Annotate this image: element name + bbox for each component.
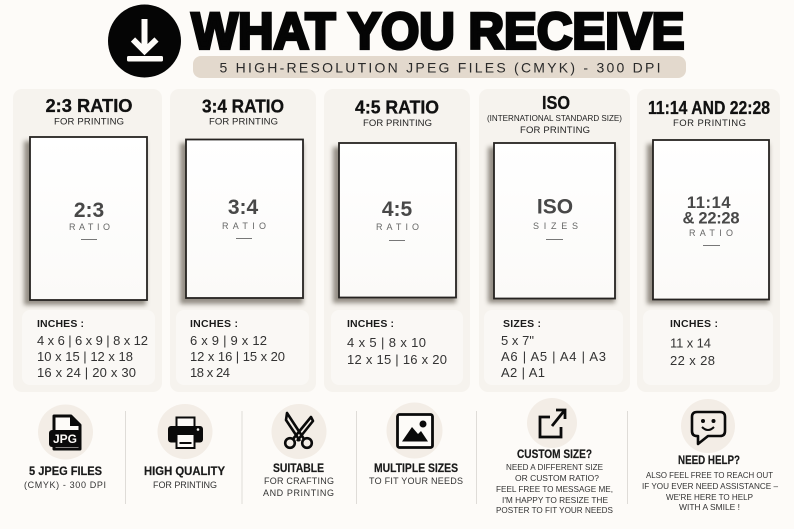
description: POSTER TO FIT YOUR NEEDS	[496, 505, 613, 515]
description: WITH A SMILE !	[679, 502, 740, 512]
size list	[22, 310, 155, 385]
size list	[643, 310, 773, 385]
size list: 4 x 5 | 8 x 10	[347, 335, 426, 350]
caption: FOR PRINTING	[209, 116, 278, 128]
title: WHAT YOU RECEIVE	[192, 2, 684, 60]
label: HIGH QUALITY	[144, 464, 225, 478]
feature: multiple sizes	[369, 402, 463, 486]
icon: download	[108, 4, 181, 78]
poster frame: 2:3	[74, 199, 104, 222]
panel: 2:3 ratio	[13, 89, 162, 392]
size list: A6 | A5 | A4 | A3	[501, 349, 606, 364]
panel: 3:4 ratio	[170, 89, 316, 392]
description: WE'RE HERE TO HELP	[666, 492, 753, 502]
size list: INCHES :	[37, 318, 84, 330]
poster frame	[647, 140, 769, 304]
poster frame	[180, 140, 303, 304]
caption: FOR PRINTING	[363, 118, 432, 129]
feature: need help	[642, 399, 778, 512]
heading: 2:3 RATIO	[46, 96, 132, 116]
icon: jpg file: JPG	[53, 432, 77, 446]
size list: INCHES :	[347, 318, 394, 330]
size list: 22 x 28	[670, 353, 715, 368]
icon: picture	[398, 414, 432, 448]
size list: 5 x 7"	[501, 333, 534, 348]
sublabel: FOR CRAFTING	[264, 476, 334, 486]
poster frame: RATIO	[376, 222, 419, 232]
size list: 18 x 24	[190, 365, 230, 380]
heading: 3:4 RATIO	[202, 96, 284, 116]
poster frame: ISO	[537, 196, 573, 218]
poster frame: 4:5	[382, 198, 412, 221]
feature: high quality	[144, 404, 225, 490]
description: ALSO FEEL FREE TO REACH OUT	[646, 470, 773, 480]
label: NEED HELP?	[678, 453, 740, 467]
size list: 11 x 14	[670, 336, 711, 350]
description: OR CUSTOM RATIO?	[515, 473, 599, 483]
size list: 16 x 24 | 20 x 30	[37, 365, 136, 380]
panel: ISO sizes	[479, 89, 630, 392]
poster frame	[333, 143, 456, 303]
size list: INCHES :	[190, 318, 238, 330]
caption: FOR PRINTING	[54, 116, 124, 128]
panel: 4:5 ratio	[324, 89, 470, 392]
icon: printer	[168, 418, 203, 448]
size list: 10 x 15 | 12 x 18	[37, 349, 133, 364]
heading: 11:14 AND 22:28	[648, 98, 770, 118]
sublabel: (CMYK) - 300 DPI	[24, 480, 106, 490]
feature: suitable: AND PRINTING	[263, 488, 334, 498]
poster frame: RATIO	[222, 221, 266, 231]
size list: SIZES :	[503, 318, 541, 330]
poster frame: SIZES	[533, 221, 578, 231]
sublabel: FOR PRINTING	[153, 480, 217, 490]
description: NEED A DIFFERENT SIZE	[506, 462, 603, 472]
size list: 12 x 16 | 15 x 20	[190, 349, 285, 364]
poster frame: & 22:28	[682, 210, 740, 228]
description: I'M HAPPY TO RESIZE THE	[502, 495, 608, 505]
note: (INTERNATIONAL STANDARD SIZE)	[487, 114, 622, 123]
feature: 5 jpeg files	[24, 404, 106, 490]
size list: A2 | A1	[501, 365, 545, 380]
description: IF YOU EVER NEED ASSISTANCE –	[642, 481, 778, 491]
size list: 12 x 15 | 16 x 20	[347, 352, 447, 367]
poster frame: RATIO	[689, 228, 733, 238]
label: SUITABLE	[273, 461, 324, 475]
panel: 11:14 and 22:28	[637, 89, 780, 392]
description	[496, 462, 613, 515]
label: CUSTOM SIZE?	[517, 447, 592, 461]
size list: INCHES :	[670, 318, 718, 330]
description	[642, 470, 778, 512]
icon: resize arrow	[540, 410, 565, 437]
poster frame: RATIO	[69, 222, 110, 232]
poster frame	[24, 137, 147, 305]
label: MULTIPLE SIZES	[374, 461, 458, 475]
size list: 6 x 9 | 9 x 12	[190, 333, 267, 348]
heading: 4:5 RATIO	[355, 98, 439, 118]
caption: FOR PRINTING	[520, 125, 590, 136]
poster frame: 3:4	[228, 196, 258, 219]
poster frame	[488, 143, 615, 303]
subtitle pill	[193, 56, 686, 78]
poster frame: 11:14	[687, 194, 731, 212]
icon: smile bubble	[692, 412, 725, 444]
icon: scissors	[285, 413, 313, 448]
sublabel: TO FIT YOUR NEEDS	[369, 476, 463, 486]
size list	[484, 310, 623, 385]
size list: 4 x 6 | 6 x 9 | 8 x 12	[37, 333, 148, 348]
heading: ISO	[542, 93, 570, 113]
feature: suitable	[263, 404, 334, 498]
size list	[331, 310, 463, 385]
caption: FOR PRINTING	[673, 118, 746, 129]
label: 5 JPEG FILES	[29, 464, 102, 478]
subtitle pill: 5 HIGH-RESOLUTION JPEG FILES (CMYK) - 300 DPI	[220, 60, 660, 76]
feature: custom size	[496, 398, 613, 515]
size list	[176, 310, 309, 385]
description: FEEL FREE TO MESSAGE ME,	[496, 484, 613, 494]
